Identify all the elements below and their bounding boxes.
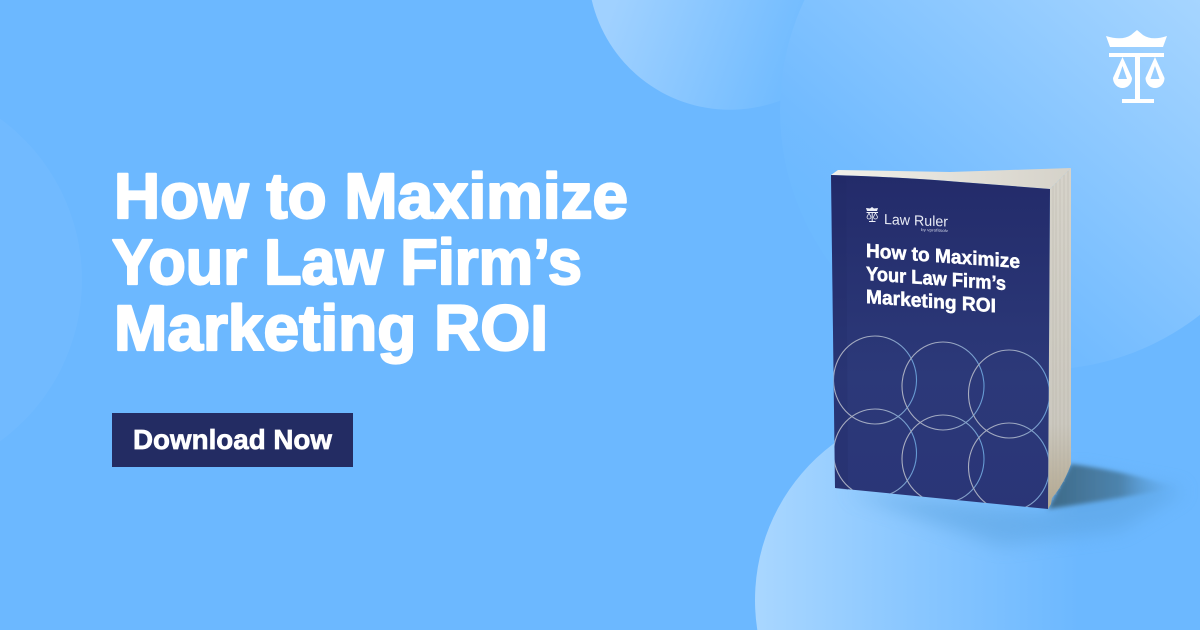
title: Marketing ROI <box>114 292 548 364</box>
book cast shadow <box>1048 464 1176 509</box>
title <box>112 160 628 364</box>
cover logo byline: by vprofitsolv <box>921 227 948 233</box>
page edge lines <box>1053 171 1068 500</box>
book top edge <box>831 168 1071 189</box>
cover title: How to Maximize <box>866 240 1020 273</box>
book ground shadow <box>845 470 1185 545</box>
cover rings <box>834 336 1050 511</box>
logo: crown and scales <box>1106 30 1167 103</box>
cover title <box>866 240 1020 317</box>
background circle: left <box>0 118 82 442</box>
cover title: Your Law Firm’s <box>866 263 1006 295</box>
cover logo icon <box>866 207 878 222</box>
background circle: bottom right <box>755 405 1145 630</box>
background circle: top right large <box>780 0 1200 370</box>
book <box>831 168 1185 545</box>
cover spine fold <box>831 175 848 490</box>
cover logo wordmark: Law Ruler <box>884 212 948 231</box>
book pages <box>1048 168 1071 509</box>
title: How to Maximize <box>114 160 628 232</box>
button: download now: Download Now <box>133 424 332 455</box>
button: download now <box>112 413 353 467</box>
cover title: Marketing ROI <box>866 286 996 317</box>
book cover <box>831 175 1050 509</box>
title: Your Law Firm’s <box>112 226 582 298</box>
background circle: top center <box>592 0 868 110</box>
